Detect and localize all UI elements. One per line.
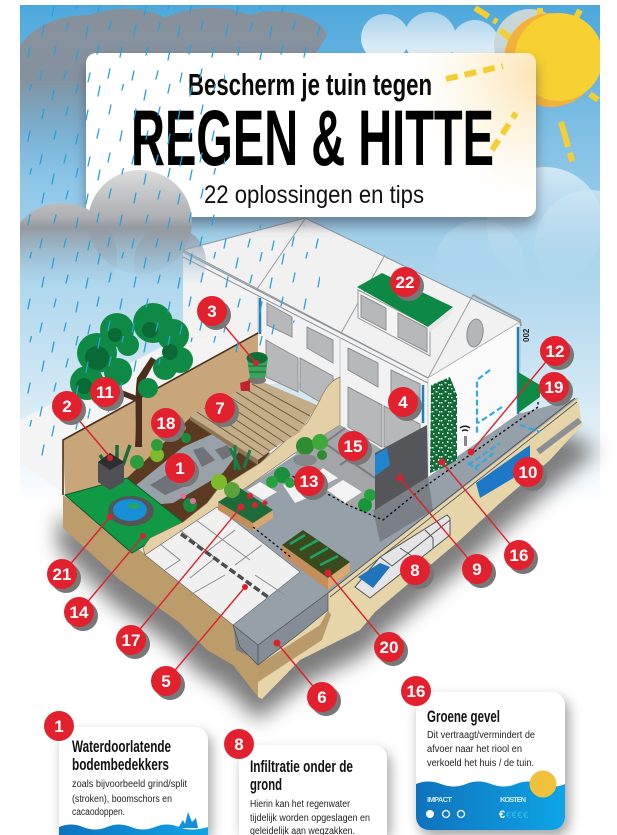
cost rating: KOSTEN [500,795,526,804]
cost rating: €€€€ [506,810,528,820]
badge 19 [539,372,573,406]
card 8 number [224,729,254,759]
card 1: cacaodoppen. [72,807,125,818]
base soil shadow [58,430,597,720]
badge 13 [294,466,328,500]
badge 1: 1 [175,459,185,478]
card 8: tijdelijk worden opgeslagen en [250,813,370,824]
badge 21: 21 [53,565,71,584]
plants and shrubs [100,425,376,512]
soil base [63,398,582,699]
impact rating [426,795,464,818]
sky background [20,5,617,505]
cost rating [499,795,528,821]
badge 15 [338,431,372,465]
ground surface gravel [217,398,578,645]
paving driveway 5 [145,507,300,625]
oval window [465,318,485,348]
card 1: bodembedekkers [72,755,169,774]
storm cloud top [20,8,327,156]
rain barrel 3 [240,352,268,391]
sun rays [475,8,598,164]
badge 5: 5 [161,672,171,691]
house number: 002 [522,328,531,342]
badge 17: 17 [122,631,140,650]
badge 22: 22 [396,273,414,292]
badge 16: 16 [510,546,528,565]
windows [266,303,420,447]
badge 6: 6 [317,688,327,707]
back garden wall [63,333,258,495]
card 16 number: 16 [407,682,425,701]
dormer [357,273,453,356]
dark wall 9 with blue tank [375,425,428,510]
badge 9 [396,474,496,588]
gravel path [135,432,240,505]
card 8 [239,745,391,835]
badge 12: 12 [546,342,564,361]
badge 19: 19 [545,378,563,397]
smart irrigation wifi icon [460,426,470,446]
card 1 number: 1 [54,717,64,736]
street cross section [233,398,577,665]
watering can [240,380,250,391]
badge 18 [151,408,185,442]
badge 7: 7 [215,399,225,418]
garden soil [127,418,270,525]
badge 22 [390,267,424,301]
vegetable planter 20 [282,530,350,590]
badge 10: 10 [519,463,537,482]
badge 18: 18 [157,414,175,433]
curved tan retaining wall [143,377,340,555]
card 8: Hierin kan het regenwater [250,799,351,810]
badge 14 [64,533,146,631]
green wall 16 [430,377,457,473]
downpipes [260,298,518,423]
badge 1 [165,453,199,487]
card 16: afvoer naar het riool en [427,744,522,755]
badge 6 [274,640,341,716]
badge 15: 15 [344,437,362,456]
card 16 [416,692,569,835]
badge 20 [324,570,408,666]
card 1: Waterdoorlatende [72,737,171,756]
heading line 1: Bescherm je tuin tegen [188,67,432,102]
white clouds [361,9,600,260]
badge 7 [205,393,239,427]
card 16: Dit vertraagt/vermindert de [427,730,535,741]
cost rating: € [499,809,505,821]
house [183,218,531,478]
raised planter 17 [218,482,273,531]
badge 4 [388,387,422,421]
title card [86,53,536,225]
card 16: verkoeld het huis / de tuin. [427,758,534,769]
badge 17 [116,504,244,659]
rain pit box 2 [98,453,124,490]
badge 2 [52,391,113,461]
badge 3 [197,296,259,366]
badge 11 [90,377,124,411]
facade [183,252,428,478]
green side strip 19 [518,372,540,413]
infiltration trough 10 and pipes [476,420,580,498]
card 8: Infiltratie onder de [250,757,353,776]
badge 20: 20 [380,638,398,657]
pond 21 [108,496,154,526]
badge 9: 9 [472,560,482,579]
badge 12 [468,336,574,456]
card 16 sun [530,770,556,798]
badge 10 [513,457,547,491]
badge 11: 11 [96,383,114,402]
badge 5 [151,584,248,700]
blue dashed drainage lines [468,370,540,470]
wooden deck [190,380,317,465]
badge 8 [400,555,434,589]
sun rays over card [446,66,516,150]
tree 11 [70,303,193,447]
badge 2: 2 [62,397,72,416]
buried crates 8 [355,515,450,598]
badge 21 [47,514,113,593]
badge 8: 8 [410,561,420,580]
card 16 wave [416,782,565,830]
patio tiles [247,425,378,510]
card 16 number [401,676,431,706]
card 1: (stroken), boomschors en [72,794,172,805]
roof [183,218,520,378]
impact rating: IMPACT [427,795,452,804]
badge 16 [438,458,538,574]
card 1 number [44,711,74,741]
badge 13: 13 [300,472,318,491]
card 1 [59,727,212,835]
rain [20,5,320,470]
sun [504,13,603,107]
badge 14: 14 [70,603,89,622]
grass lawn 14 [65,478,183,553]
badge 3: 3 [207,302,217,321]
card 8: grond [250,775,282,794]
black dotted cable [253,402,538,558]
card 16: Groene gevel [427,707,500,726]
neighbouring plane [20,335,260,492]
shadow of dark wall on gravel [373,477,433,542]
card 8 number: 8 [234,735,244,754]
gable [428,322,520,478]
subheading: 22 oplossingen en tips [204,181,424,209]
card 1: zoals bijvoorbeeld grind/split [72,779,187,790]
badge 4: 4 [398,393,408,412]
card 1 wave [59,812,208,835]
lower storm cloud [20,170,206,280]
